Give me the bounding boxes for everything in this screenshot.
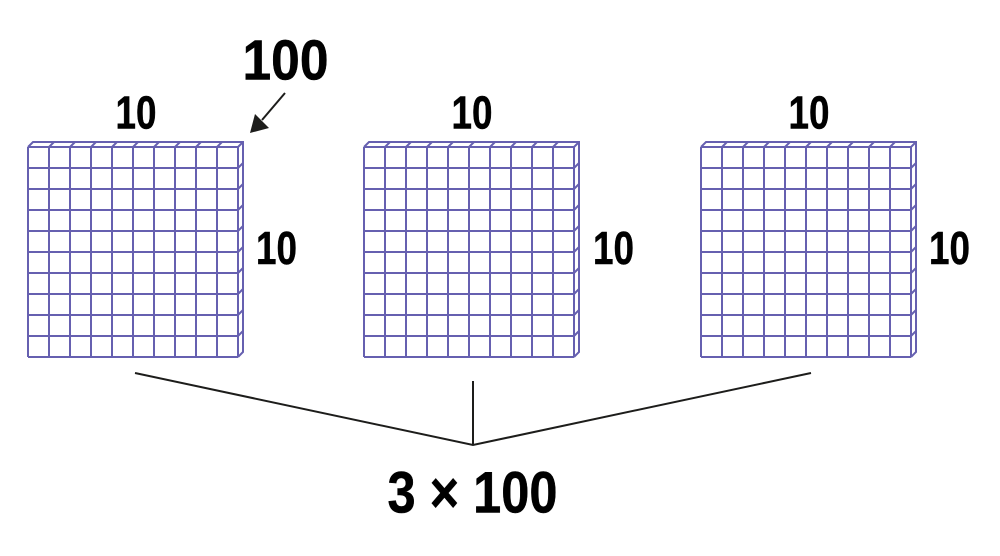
panel: first hundred block — [28, 86, 297, 357]
label: top 10: 10 — [788, 86, 830, 138]
label: side 10: 10 — [256, 222, 297, 274]
result: 3 × 100: 3 × 100 — [388, 460, 558, 526]
heading: 100: 100 — [242, 28, 328, 92]
grid: third block — [701, 142, 916, 357]
label: top 10: 10 — [452, 86, 492, 138]
panel: third hundred block — [701, 86, 970, 357]
grid: second block — [364, 142, 579, 357]
label: side 10: 10 — [593, 222, 634, 274]
label: top 10: 10 — [116, 86, 156, 138]
grid: first block — [28, 142, 243, 357]
panel: second hundred block — [364, 86, 634, 357]
arrow: points to first block — [250, 93, 285, 133]
connector lines — [135, 373, 811, 445]
label: side 10: 10 — [929, 222, 970, 274]
